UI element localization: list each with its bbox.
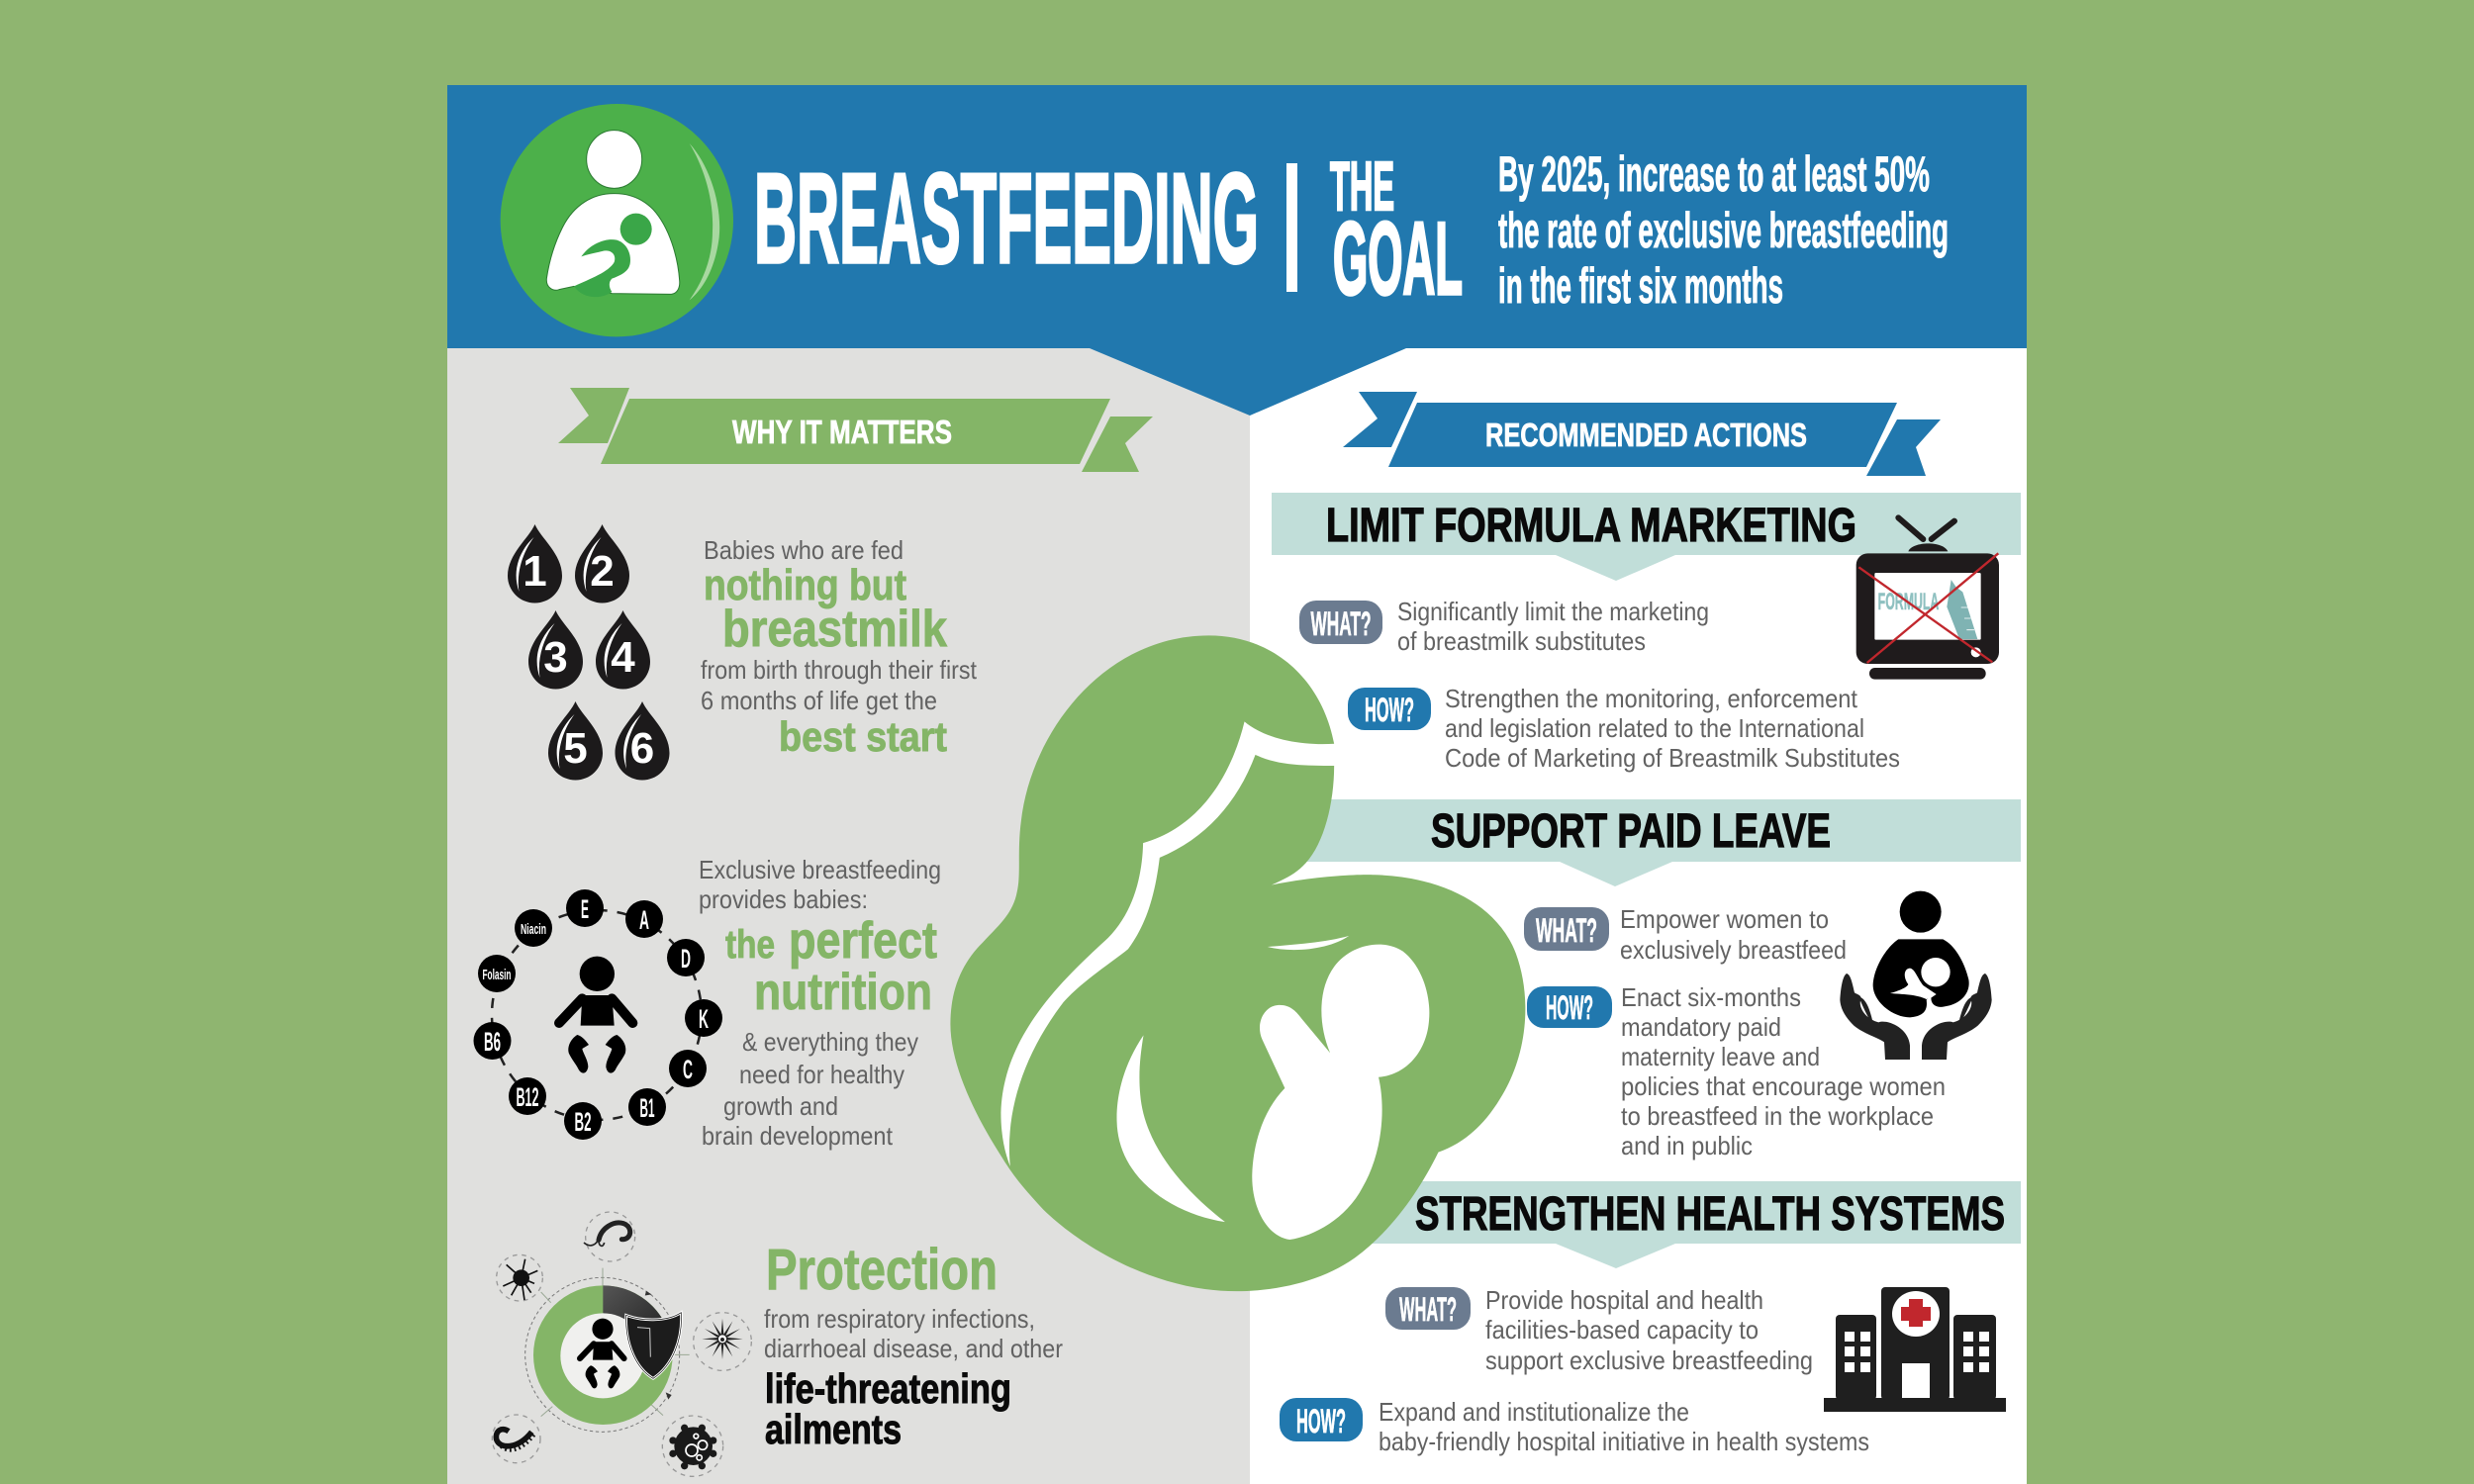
icon: germ top [584,1212,635,1261]
icon: germ lower right [662,1416,723,1476]
section bar: limit formula marketing [1272,493,2021,581]
icon: six numbered milk drops: 1 [523,547,547,596]
text: the perfect nutrition: Exclusive breastfeeding [699,855,941,884]
text: the perfect nutrition [699,855,941,1151]
text: protection [764,1238,1063,1452]
panel: left why it matters background [447,336,1250,1484]
section bar: limit formula marketing: LIMIT FORMULA MARKETING [1326,500,1856,552]
header band [447,85,2027,416]
icon: large mother and baby silhouette [950,635,1525,1291]
group: limit formula what: WHAT? [1310,605,1372,643]
text: the perfect nutrition: growth and [723,1091,838,1121]
group: paid leave how: and in public [1621,1131,1753,1160]
text: the perfect nutrition: nutrition [754,964,932,1021]
group: paid leave how: mandatory paid [1621,1012,1781,1042]
group: paid leave how: policies that encourage women [1621,1071,1946,1101]
chart: vitamin ring around baby: Folasin [483,967,511,983]
icon: shield [626,1313,682,1378]
icon: six numbered milk drops: 3 [543,633,568,682]
text: goal statement: in the first six months [1498,258,1783,314]
group: paid leave how: to breastfeed in the workplace [1621,1101,1934,1131]
text: nothing but breastmilk: 6 months of life get the [701,686,937,715]
ribbon: recommended actions [1343,392,1941,476]
chart: vitamin ring around baby: B1 [639,1093,655,1123]
text: nothing but breastmilk: Babies who are fed [704,535,904,565]
text: nothing but breastmilk: breastmilk [722,601,947,658]
icon: crossed out formula tv: FORMULA [1878,589,1939,615]
group: limit formula what: Significantly limit the marketing [1397,597,1709,626]
text: nothing but breastmilk: nothing but [704,561,906,609]
heading: the goal [1330,147,1463,317]
icon: germ right [694,1313,751,1370]
text: the perfect nutrition: & everything they [742,1027,918,1057]
section bar: strengthen health systems [1366,1181,2021,1268]
header band: BREASTFEEDING [754,147,1259,290]
group: limit formula how: HOW? [1365,692,1414,729]
group: limit formula how: and legislation related to the International [1445,713,1864,743]
group: limit formula what [1299,597,1709,656]
icon: six numbered milk drops [508,524,669,781]
group: health systems how: HOW? [1296,1403,1346,1440]
text: nothing but breastmilk: from birth through their first [701,655,978,685]
chart: vitamin ring around baby: B12 [517,1082,538,1112]
icon: breastfeeding logo [501,104,733,336]
text: nothing but breastmilk: best start [779,713,947,760]
text: protection: ailments [765,1406,902,1452]
text: goal statement [1498,146,1949,314]
icon: six numbered milk drops: 4 [611,633,635,682]
text: the perfect nutrition: need for healthy [739,1060,904,1089]
header band: GOAL [1333,202,1463,317]
text: protection: from respiratory infections, [764,1304,1035,1334]
ribbon: recommended actions: RECOMMENDED ACTIONS [1485,417,1807,453]
group: paid leave how: Enact six-months [1621,982,1801,1012]
group: limit formula how: Code of Marketing of Breastmilk Substitutes [1445,743,1900,773]
group: health systems what: facilities-based capacity to [1485,1315,1759,1345]
group: paid leave how [1527,982,1946,1160]
group: paid leave what: WHAT? [1536,912,1597,950]
group: health systems what: Provide hospital and health [1485,1285,1763,1315]
text: the perfect nutrition: brain development [702,1121,894,1151]
section bar: support paid leave [1306,799,2021,886]
icon: six numbered milk drops: 6 [630,724,654,773]
group: paid leave what: Empower women to [1620,904,1829,934]
chart: vitamin ring around baby: B6 [484,1027,501,1057]
group: health systems what: WHAT? [1399,1291,1457,1329]
text: protection: Protection [766,1238,998,1302]
text: goal statement: By 2025, increase to at least 50% [1498,146,1930,202]
chart: vitamin ring around baby: E [581,894,589,924]
text: the perfect nutrition: the [725,923,775,967]
chart: vitamin ring around baby [473,889,722,1140]
section bar: strengthen health systems: STRENGTHEN HEALTH SYSTEMS [1415,1188,2005,1241]
icon: germ upper left [497,1254,542,1301]
text: protection: life-threatening [765,1365,1011,1412]
group: limit formula what: of breastmilk substitutes [1397,626,1646,656]
chart: vitamin ring around baby: K [699,1004,709,1034]
group: paid leave what [1524,904,1847,965]
group: health systems what [1385,1285,1813,1375]
text: goal statement: the rate of exclusive breastfeeding [1498,203,1949,258]
icon: six numbered milk drops: 5 [563,724,588,773]
chart: vitamin ring around baby: B2 [574,1107,592,1137]
group: limit formula how: Strengthen the monitoring, enforcement [1445,684,1858,713]
ribbon: why it matters: WHY IT MATTERS [732,414,952,450]
chart: vitamin ring around baby: D [681,944,691,974]
icon: germ lower left [492,1415,540,1463]
group: paid leave how: maternity leave and [1621,1042,1820,1071]
chart: vitamin ring around baby: A [639,905,649,935]
text: the perfect nutrition: provides babies: [699,884,868,914]
icon: mother and baby in caring hands [1840,891,1992,1060]
icon: hospital [1824,1287,2006,1412]
text: protection: diarrhoeal disease, and other [764,1334,1063,1363]
group: paid leave what: exclusively breastfeed [1620,935,1847,965]
icon: small baby [580,1319,624,1388]
ribbon: why it matters [558,388,1153,472]
panel: right recommended actions background [1250,336,2027,1484]
group: health systems how: baby-friendly hospital initiative in health systems [1379,1427,1869,1456]
heading: the goal: THE [1330,147,1394,225]
icon: crossed out formula tv [1856,517,1999,680]
group: health systems how: Expand and institutionalize the [1379,1397,1689,1427]
group: limit formula how [1348,684,1900,773]
icon: protection shield and germs [492,1212,751,1476]
text: the perfect nutrition: perfect [789,912,937,970]
chart: vitamin ring around baby: Niacin [521,921,546,938]
group: health systems how [1280,1397,1869,1456]
group: paid leave how: HOW? [1546,989,1593,1027]
chart: vitamin ring around baby: C [683,1055,693,1084]
group: health systems what: support exclusive breastfeeding [1485,1345,1813,1375]
icon: baby [559,957,632,1073]
icon: six numbered milk drops: 2 [590,547,615,596]
section bar: support paid leave: SUPPORT PAID LEAVE [1431,805,1831,858]
text: nothing but breastmilk [701,535,978,760]
